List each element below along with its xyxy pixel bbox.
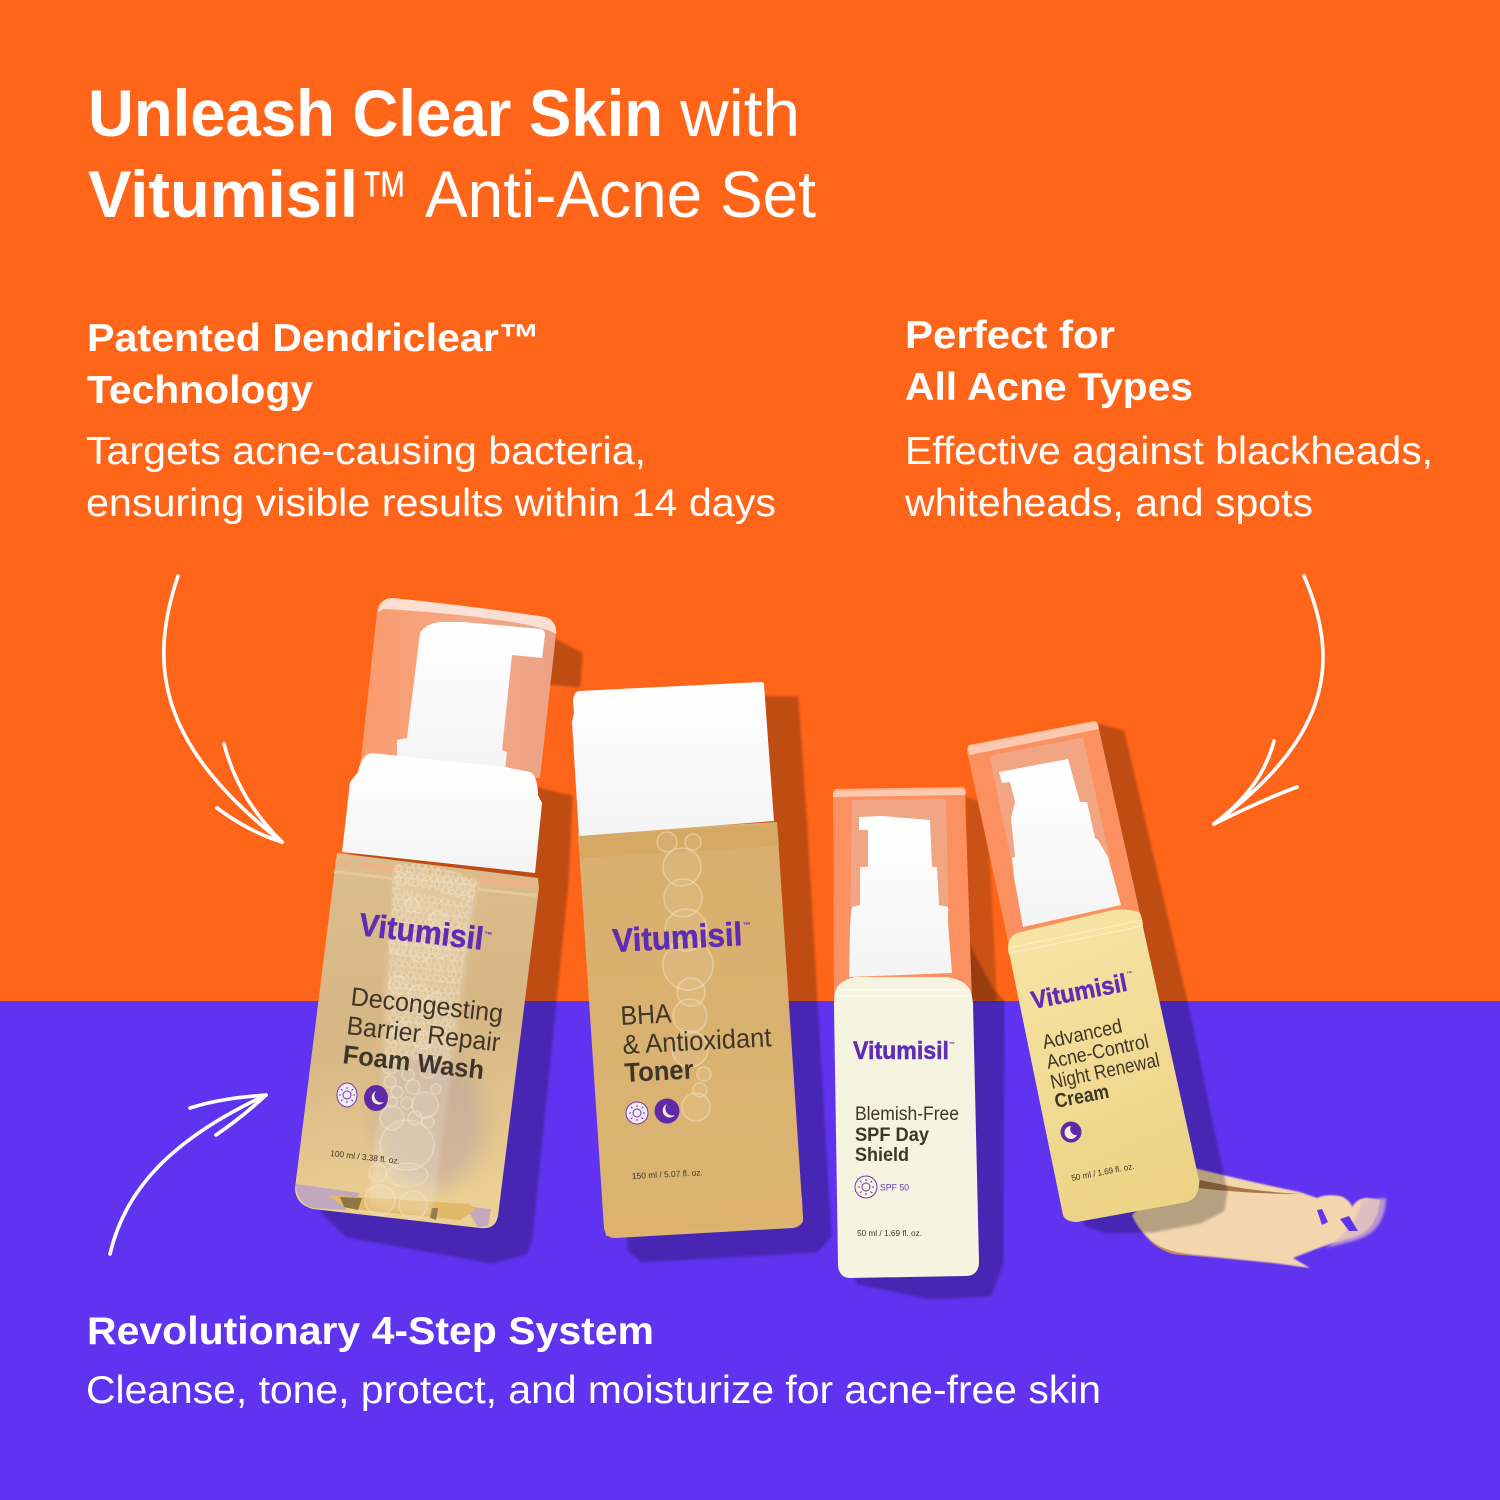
product: night renewal cream bottle: Night Renewal: [1048, 1049, 1162, 1094]
product: toner bottle: [572, 682, 803, 1238]
arrow: top right pointing to cream: [1214, 576, 1323, 824]
label text: Vitumisil: [611, 915, 743, 959]
text block: all acne types: whiteheads, and spots: [904, 482, 1313, 525]
inner cap: [990, 738, 1110, 878]
liquid top band: [579, 824, 779, 858]
SPF label: SPF 50: [880, 1182, 909, 1192]
overcap rim highlight: [833, 787, 966, 797]
product: night renewal cream bottle: Acne-Control: [1044, 1031, 1151, 1074]
cap: [572, 682, 774, 836]
background: purple bottom panel: [0, 1001, 1500, 1500]
base band: [603, 1197, 803, 1236]
text block: all acne types: All Acne Types: [905, 366, 1193, 409]
text block: all acne types: Perfect for: [905, 314, 1115, 357]
label text: Vitumisil: [357, 906, 486, 957]
clear overcap: [833, 789, 972, 1000]
inner cap: [850, 799, 949, 930]
product: SPF day shield bottle: ™: [949, 1041, 955, 1048]
bottle body: [295, 853, 539, 1228]
text block: patented technology: Technology: [87, 369, 313, 412]
text block: patented technology: Patented Dendriclear™: [87, 317, 540, 360]
product: night renewal cream bottle: ™: [1126, 970, 1133, 978]
icon: sun: [626, 1102, 648, 1124]
product: toner bottle: Toner: [624, 1054, 695, 1088]
title: ™: [360, 157, 408, 231]
base band: [296, 1184, 491, 1227]
text block: 4-step system: Revolutionary 4-Step System: [87, 1310, 654, 1353]
overcap rim highlight: [378, 598, 556, 634]
product: toner bottle: BHA: [620, 998, 672, 1031]
product: SPF day shield bottle: SPF Day: [855, 1125, 929, 1146]
pump head: [397, 622, 545, 770]
text block: all acne types: [904, 314, 1433, 525]
neck bands: [334, 859, 537, 897]
volume text: 50 ml / 1.69 fl. oz.: [857, 1228, 922, 1238]
volume text: 50 ml / 1.69 fl. oz.: [1070, 1161, 1135, 1183]
lavender tint: [375, 1050, 485, 1190]
product: night renewal cream bottle: [967, 721, 1199, 1222]
cream smear: [1132, 1168, 1386, 1268]
label text: Vitumisil: [1029, 969, 1129, 1015]
product: SPF day shield bottle: Blemish-Free: [855, 1104, 959, 1125]
shoulder ring lines: [836, 990, 971, 996]
foam column: [365, 864, 478, 1219]
pump: [999, 759, 1121, 927]
text block: 4-step system: [86, 1310, 1101, 1412]
title: Vitumisil: [88, 157, 358, 231]
product: foam wash bottle: ™: [484, 930, 493, 940]
text block: all acne types: Effective against blackheads,: [905, 430, 1433, 473]
product shadows: [323, 635, 1226, 1298]
text block: 4-step system: Cleanse, tone, protect, and moisturize for acne-free skin: [86, 1369, 1101, 1412]
product: foam wash bottle: [295, 598, 556, 1228]
product: foam wash bottle: Foam Wash: [341, 1039, 486, 1085]
background: orange top panel: [0, 0, 1500, 1001]
product: toner bottle: & Antioxidant: [622, 1022, 773, 1060]
icon: sun SPF: [855, 1176, 877, 1198]
title: Anti-Acne Set: [425, 157, 816, 231]
bottle body: [1008, 910, 1199, 1222]
bottle body: [834, 977, 979, 1278]
product: night renewal cream bottle: Cream: [1053, 1081, 1111, 1113]
arrow: bottom left pointing to foam wash: [110, 1095, 266, 1254]
icon: moon: [1060, 1122, 1082, 1142]
pump collar: [342, 753, 542, 873]
body shadows: [323, 635, 1226, 1298]
volume text: 150 ml / 5.07 fl. oz.: [632, 1167, 703, 1181]
icon: moon: [654, 1098, 680, 1124]
label text: Vitumisil: [853, 1037, 949, 1065]
product: foam wash bottle: Decongesting: [349, 981, 505, 1028]
text block: patented technology: Targets acne-causing bacteria,: [86, 430, 646, 473]
icon: moon: [364, 1085, 388, 1111]
product: toner bottle: ™: [743, 921, 751, 930]
volume text: 100 ml / 3.38 fl. oz.: [330, 1148, 400, 1166]
shoulder ring lines: [1009, 920, 1143, 953]
title: with: [679, 76, 800, 150]
clear overcap: [967, 722, 1143, 950]
product: SPF day shield bottle: Shield: [855, 1145, 909, 1166]
overcap rim highlight: [968, 721, 1099, 755]
product: night renewal cream bottle: Advanced: [1040, 1016, 1124, 1054]
bubbles: [657, 832, 713, 1121]
arrow: top left pointing to foam wash: [164, 576, 282, 842]
title: [88, 76, 816, 231]
text block: patented technology: ensuring visible results within 14 days: [86, 482, 776, 525]
clear cap shadows: [965, 797, 997, 1001]
title: Unleash Clear Skin: [88, 76, 663, 150]
product: SPF day shield bottle: [833, 787, 979, 1278]
pump: [849, 816, 952, 977]
clear overcap: [360, 598, 556, 778]
product: foam wash bottle: Barrier Repair: [345, 1010, 502, 1057]
icon: sun: [337, 1083, 357, 1107]
bottle body: [578, 822, 803, 1238]
text block: patented technology: [86, 317, 776, 525]
